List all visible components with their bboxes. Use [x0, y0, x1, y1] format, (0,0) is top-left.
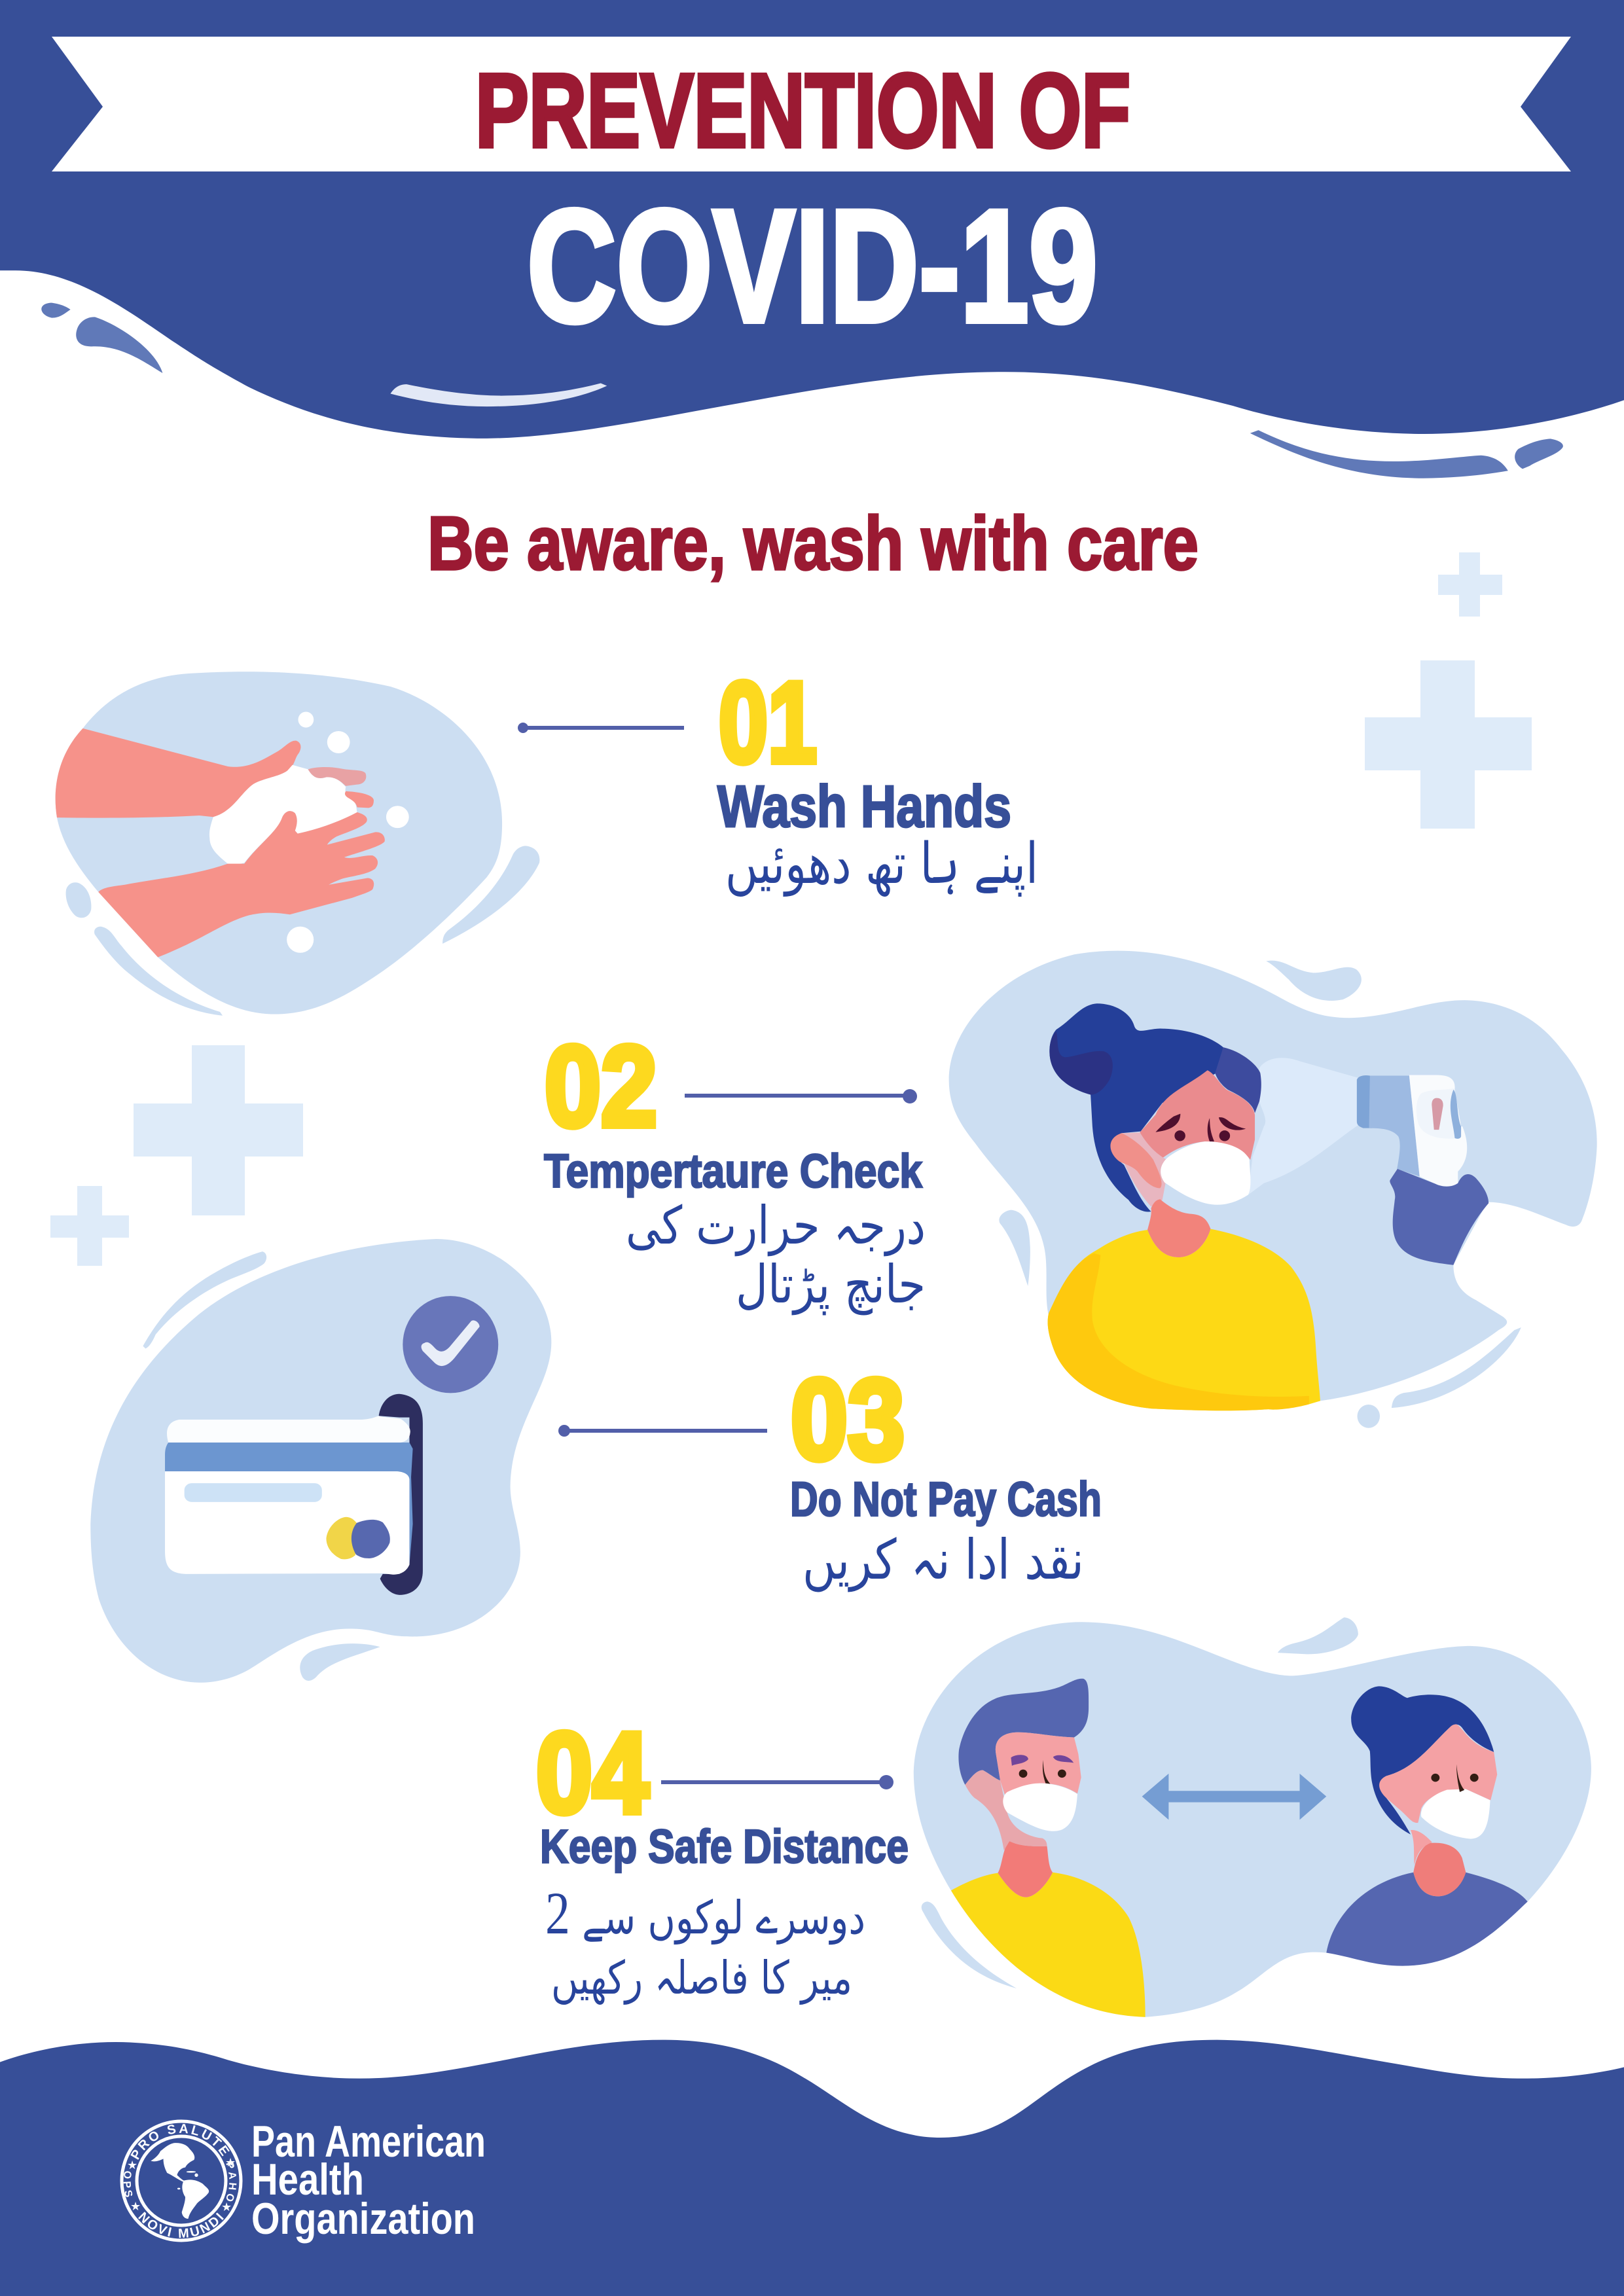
logo ring text	[123, 2124, 237, 2238]
sweater shade	[1048, 1253, 1309, 1410]
check badge	[403, 1296, 498, 1393]
illustration: card payment	[90, 1239, 551, 1683]
step 04 urdu line 2: میر کا فاصلہ رکھیں	[551, 1951, 852, 2005]
soap foam	[209, 765, 357, 864]
organization name	[251, 2117, 486, 2244]
face mask	[1161, 1141, 1250, 1205]
step 02 number: 02	[545, 1023, 657, 1151]
water splashes	[922, 1617, 1358, 1988]
woman figure	[1326, 1686, 1528, 1966]
thermometer	[1357, 1075, 1467, 1187]
scanner beam	[1248, 1058, 1359, 1195]
step 04 connector line	[661, 1775, 893, 1789]
subtitle: Be aware, wash with care	[427, 501, 1199, 586]
water splashes	[66, 846, 539, 1016]
logo ring text: PRO SALUTE	[130, 2124, 230, 2160]
upper arm	[56, 728, 300, 818]
glove	[1390, 1169, 1489, 1265]
step 01 connector line	[518, 723, 684, 733]
credit card	[165, 1416, 413, 1575]
organization name: Health	[251, 2155, 364, 2204]
step 03 label: Do Not Pay Cash	[790, 1472, 1102, 1526]
fingers behind	[308, 767, 374, 808]
step 02 label: Tempertaure Check	[544, 1145, 923, 1198]
logo ring text: P A H O	[226, 2162, 237, 2202]
logo ring text: ★	[130, 2200, 141, 2214]
step 02 urdu line 2: جانچ پڑتال	[736, 1254, 926, 1316]
step 04 urdu line 1: دوسرے لوکوں سے 2	[545, 1880, 865, 1946]
title ribbon	[52, 37, 1571, 171]
soap bubbles	[287, 711, 409, 953]
logo continents	[151, 2143, 209, 2219]
step 01 number: 01	[719, 659, 817, 787]
step 04 label: Keep Safe Distance	[540, 1821, 909, 1873]
title: covid-19: COVID-19	[527, 176, 1098, 355]
organization name: Organization	[251, 2194, 475, 2244]
lower arm	[98, 811, 385, 957]
water splashes	[143, 1251, 380, 1681]
plus sign: large left	[134, 1045, 303, 1215]
title: prevention of: PREVENTION OF	[475, 52, 1130, 169]
step 03 urdu: نقد ادا نہ کریں	[803, 1528, 1084, 1592]
step 02 connector line	[685, 1089, 917, 1103]
ear	[1110, 1133, 1162, 1188]
distance blob background	[914, 1622, 1591, 2017]
illustration: safe distance	[914, 1617, 1591, 2017]
eyes and brows	[1155, 1114, 1246, 1141]
hands blob background	[56, 672, 502, 1014]
plus sign: small left	[50, 1186, 129, 1266]
logo ring text: NOVI MUNDI	[138, 2212, 224, 2238]
step 01 label: Wash Hands	[717, 774, 1011, 840]
illustration: temperature check	[949, 951, 1597, 1428]
mask strap	[1122, 1132, 1167, 1206]
water splashes	[999, 961, 1521, 1428]
step 02 urdu line 1: درجہ حرارت کی	[626, 1195, 926, 1257]
card reader	[379, 1394, 423, 1595]
plus sign: small top right	[1438, 552, 1502, 617]
organization name: Pan American	[251, 2117, 486, 2166]
logo ring text: O P S	[123, 2171, 132, 2197]
woman hair	[1049, 1003, 1261, 1212]
double arrow	[1142, 1774, 1326, 1820]
yellow sweater	[1048, 1229, 1320, 1410]
header splashes	[41, 303, 1563, 478]
step 03 number: 03	[791, 1356, 905, 1484]
logo ring text: ★	[225, 2156, 236, 2170]
logo ring text: ★	[127, 2159, 137, 2172]
plus sign: large top right	[1365, 660, 1532, 829]
logo seal	[120, 2119, 242, 2242]
illustration: washing hands	[56, 672, 539, 1016]
man figure	[951, 1679, 1146, 2017]
neck	[1147, 1199, 1210, 1257]
step 04 number: 04	[536, 1710, 649, 1837]
step 03 connector line	[558, 1425, 767, 1437]
step 01 urdu: اپنے ہا تھ دھوئیں	[725, 831, 1038, 897]
logo ring text: ★	[221, 2200, 232, 2214]
temperature blob background	[949, 951, 1597, 1401]
card blob background	[90, 1239, 551, 1683]
woman face	[1140, 1070, 1255, 1160]
footer wave	[0, 2040, 1624, 2296]
header wave	[0, 0, 1624, 478]
